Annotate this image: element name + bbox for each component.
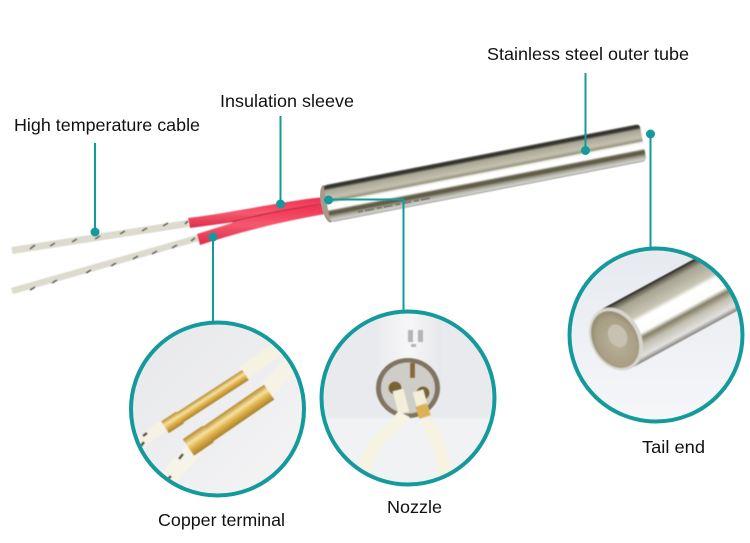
label: copper terminal: Copper terminal	[158, 510, 285, 530]
label: stainless steel outer tube: Stainless steel outer tube	[487, 44, 689, 64]
connector: nozzle	[324, 196, 404, 311]
connector: tail end	[646, 130, 655, 248]
high temperature cables	[12, 221, 198, 291]
connector: high temperature cable	[90, 143, 100, 236]
detail circle: nozzle	[318, 305, 500, 490]
label: tail end: Tail end	[642, 437, 705, 457]
label: high temperature cable: High temperature cable	[14, 115, 200, 135]
insulation sleeves	[188, 198, 331, 245]
detail circle: tail end	[568, 246, 744, 424]
label: insulation sleeve: Insulation sleeve	[220, 91, 354, 111]
connector: stainless steel tube	[581, 73, 590, 155]
detail circle: copper terminal	[125, 317, 310, 502]
label: nozzle: Nozzle	[387, 497, 442, 517]
stainless steel tube	[317, 124, 647, 224]
printed marking smudge on the tube	[358, 198, 433, 212]
connector: insulation sleeve	[276, 116, 285, 208]
connector: copper terminal	[208, 232, 218, 322]
